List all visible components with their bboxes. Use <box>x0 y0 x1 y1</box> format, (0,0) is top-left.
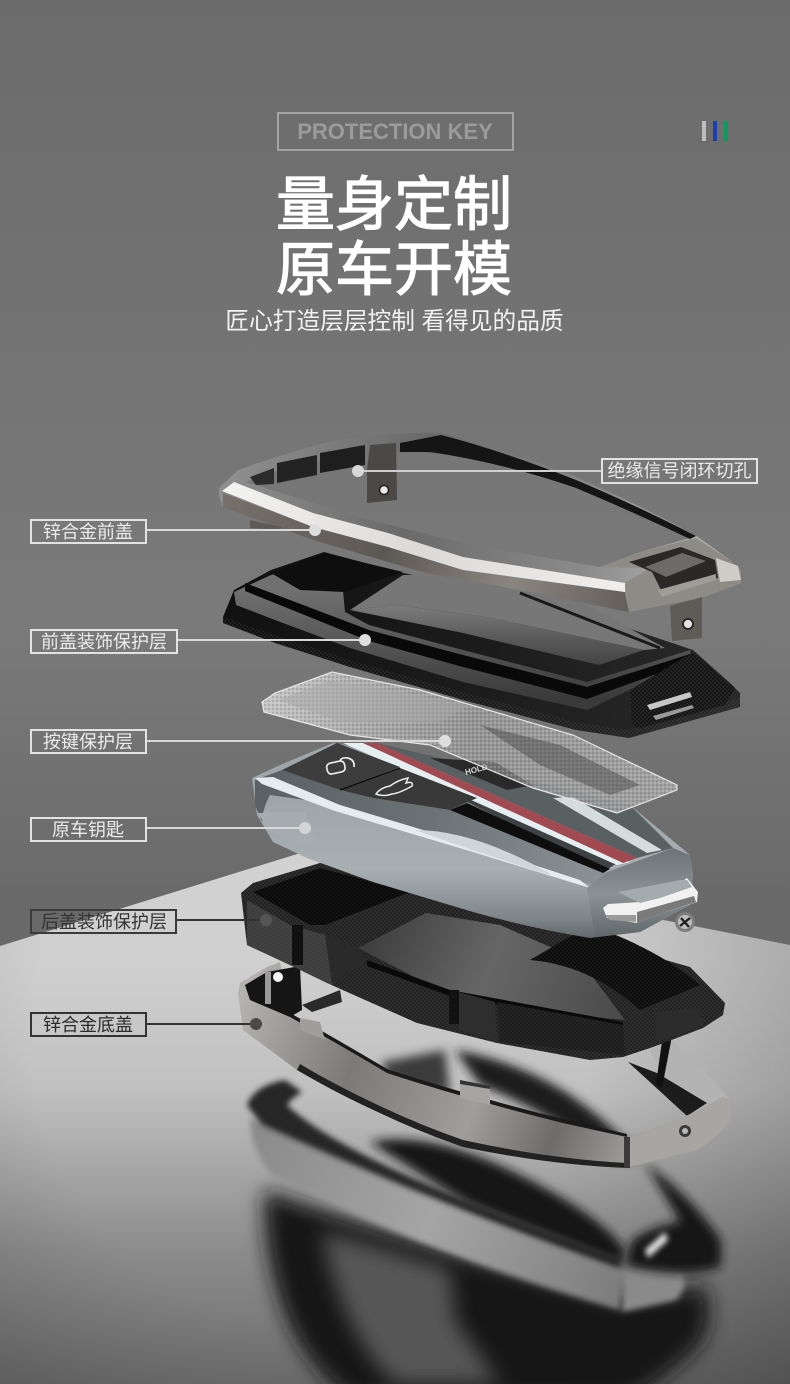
inner wall windows <box>277 455 317 483</box>
callout: zinc alloy bottom cover <box>31 1013 262 1036</box>
rear cover window <box>358 913 625 1020</box>
part: original car key <box>252 743 698 938</box>
key dark upper side <box>255 770 607 885</box>
subtitle: 匠心打造层层控制 看得见的品质 <box>225 308 564 335</box>
icon: three colored bars <box>702 121 728 141</box>
callout: rear decorative protective layer: 后盖装饰保护层 <box>41 912 167 932</box>
icon: screw <box>675 912 695 932</box>
callout: original car key: 原车钥匙 <box>52 820 124 840</box>
end piece <box>600 538 741 612</box>
tag: protection key: PROTECTION KEY <box>297 119 493 144</box>
icon: unlock <box>326 758 354 775</box>
dark top-left window <box>271 553 403 592</box>
callout: zinc alloy bottom cover: 锌合金底盖 <box>43 1015 133 1035</box>
part: rear decorative protective layer <box>241 863 725 1060</box>
callout: front decorative protective layer: 前盖装饰保护层 <box>41 632 167 652</box>
frame top surface with opening <box>219 433 741 612</box>
part: zinc alloy bottom cover <box>238 962 730 1168</box>
silhouette <box>223 552 740 738</box>
polished band <box>222 482 625 592</box>
back rim and right wall <box>650 1040 730 1118</box>
title <box>276 172 512 303</box>
window panel <box>350 605 644 665</box>
callout: zinc alloy front cover: 锌合金前盖 <box>43 522 133 542</box>
part: zinc alloy front cover <box>219 433 741 641</box>
hold button label: HOLD <box>464 762 489 777</box>
callout: button protective layer: 按键保护层 <box>43 732 133 752</box>
left inner wall <box>245 966 302 1017</box>
black groove <box>245 583 693 699</box>
title: 原车开模 <box>276 237 512 303</box>
rear cover inner carbon tray <box>253 868 410 925</box>
callout: front decorative protective layer <box>31 630 371 653</box>
part: front decorative protective layer <box>223 552 740 738</box>
reflective floor <box>0 850 790 1384</box>
key top panel with buttons and stripes <box>282 743 673 873</box>
callout: original car key <box>31 818 311 841</box>
key end face <box>587 848 693 937</box>
metal loop <box>603 878 698 923</box>
part: transparent button protective layer <box>262 672 677 813</box>
glossy plate <box>234 560 693 710</box>
top tab with hole <box>367 443 397 503</box>
floor reflection of the key case <box>247 1050 721 1384</box>
dark back rim <box>400 435 696 539</box>
callout: insulated signal closed-loop cutout: 绝缘信号闭环切孔 <box>608 461 752 481</box>
icon: trunk car <box>376 778 412 796</box>
center clip <box>460 1082 490 1105</box>
carbon side band <box>223 617 740 738</box>
highlight on key side <box>255 777 590 888</box>
callout: insulated signal closed-loop cutout <box>352 459 757 483</box>
right tab with hole <box>670 597 702 641</box>
callout: button protective layer <box>31 730 451 753</box>
carbon nose <box>630 652 735 728</box>
see-through region above window <box>350 572 665 650</box>
main metal band <box>238 962 730 1168</box>
callout: zinc alloy front cover <box>31 520 321 543</box>
title: 量身定制 <box>276 172 512 238</box>
metal side below band <box>223 493 629 612</box>
screw hole <box>679 1125 691 1137</box>
callout: rear decorative protective layer <box>31 910 272 933</box>
tag: protection key <box>278 113 513 150</box>
